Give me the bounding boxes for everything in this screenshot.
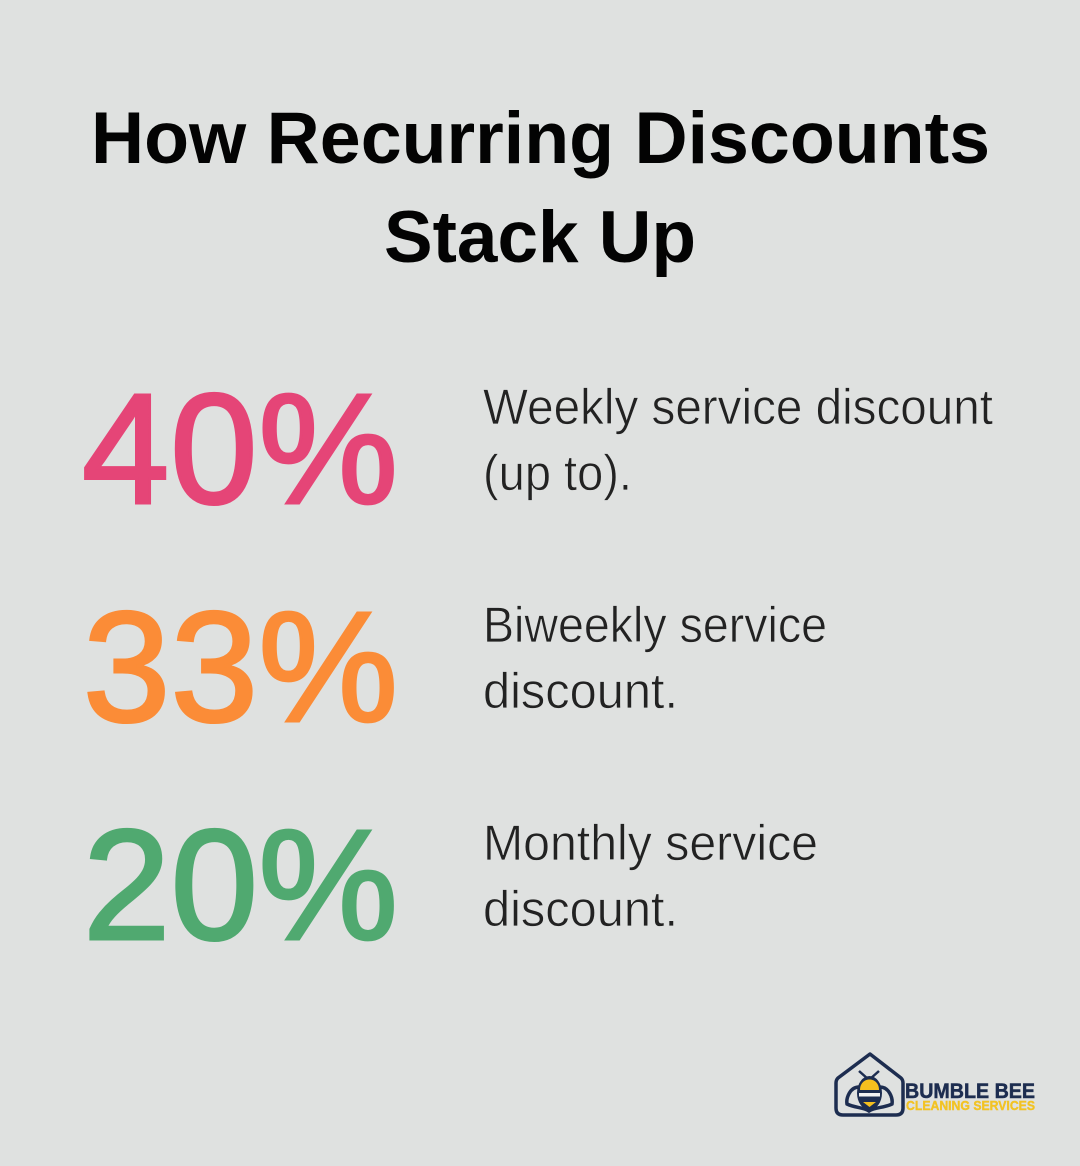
text: weekly service discount: Weekly service discount [483,379,993,435]
title: How Recurring Discounts [91,98,990,179]
text: weekly service discount: (up to). [483,445,632,501]
title: Stack Up [384,197,696,278]
number: 20%: 20% [83,798,398,973]
text: monthly service discount: Monthly service [483,815,818,871]
number: 40%: 40% [82,362,398,537]
text: biweekly service discount [483,597,827,719]
number: 33%: 33% [83,580,398,755]
stat: weekly 40% [82,362,993,537]
text: monthly service discount: discount. [483,881,678,937]
logo: Bumble Bee Cleaning Services [836,1054,1035,1115]
text: weekly service discount [483,379,993,501]
wordmark: BUMBLE BEE [905,1080,1035,1103]
text: biweekly service discount: Biweekly service [483,597,827,653]
text: biweekly service discount: discount. [483,663,678,719]
tagline: CLEANING SERVICES [906,1098,1035,1113]
stat: monthly 20% [83,798,818,973]
text: monthly service discount [483,815,818,937]
stat: biweekly 33% [83,580,827,755]
title [91,98,990,278]
icon: house with bee [836,1054,903,1115]
